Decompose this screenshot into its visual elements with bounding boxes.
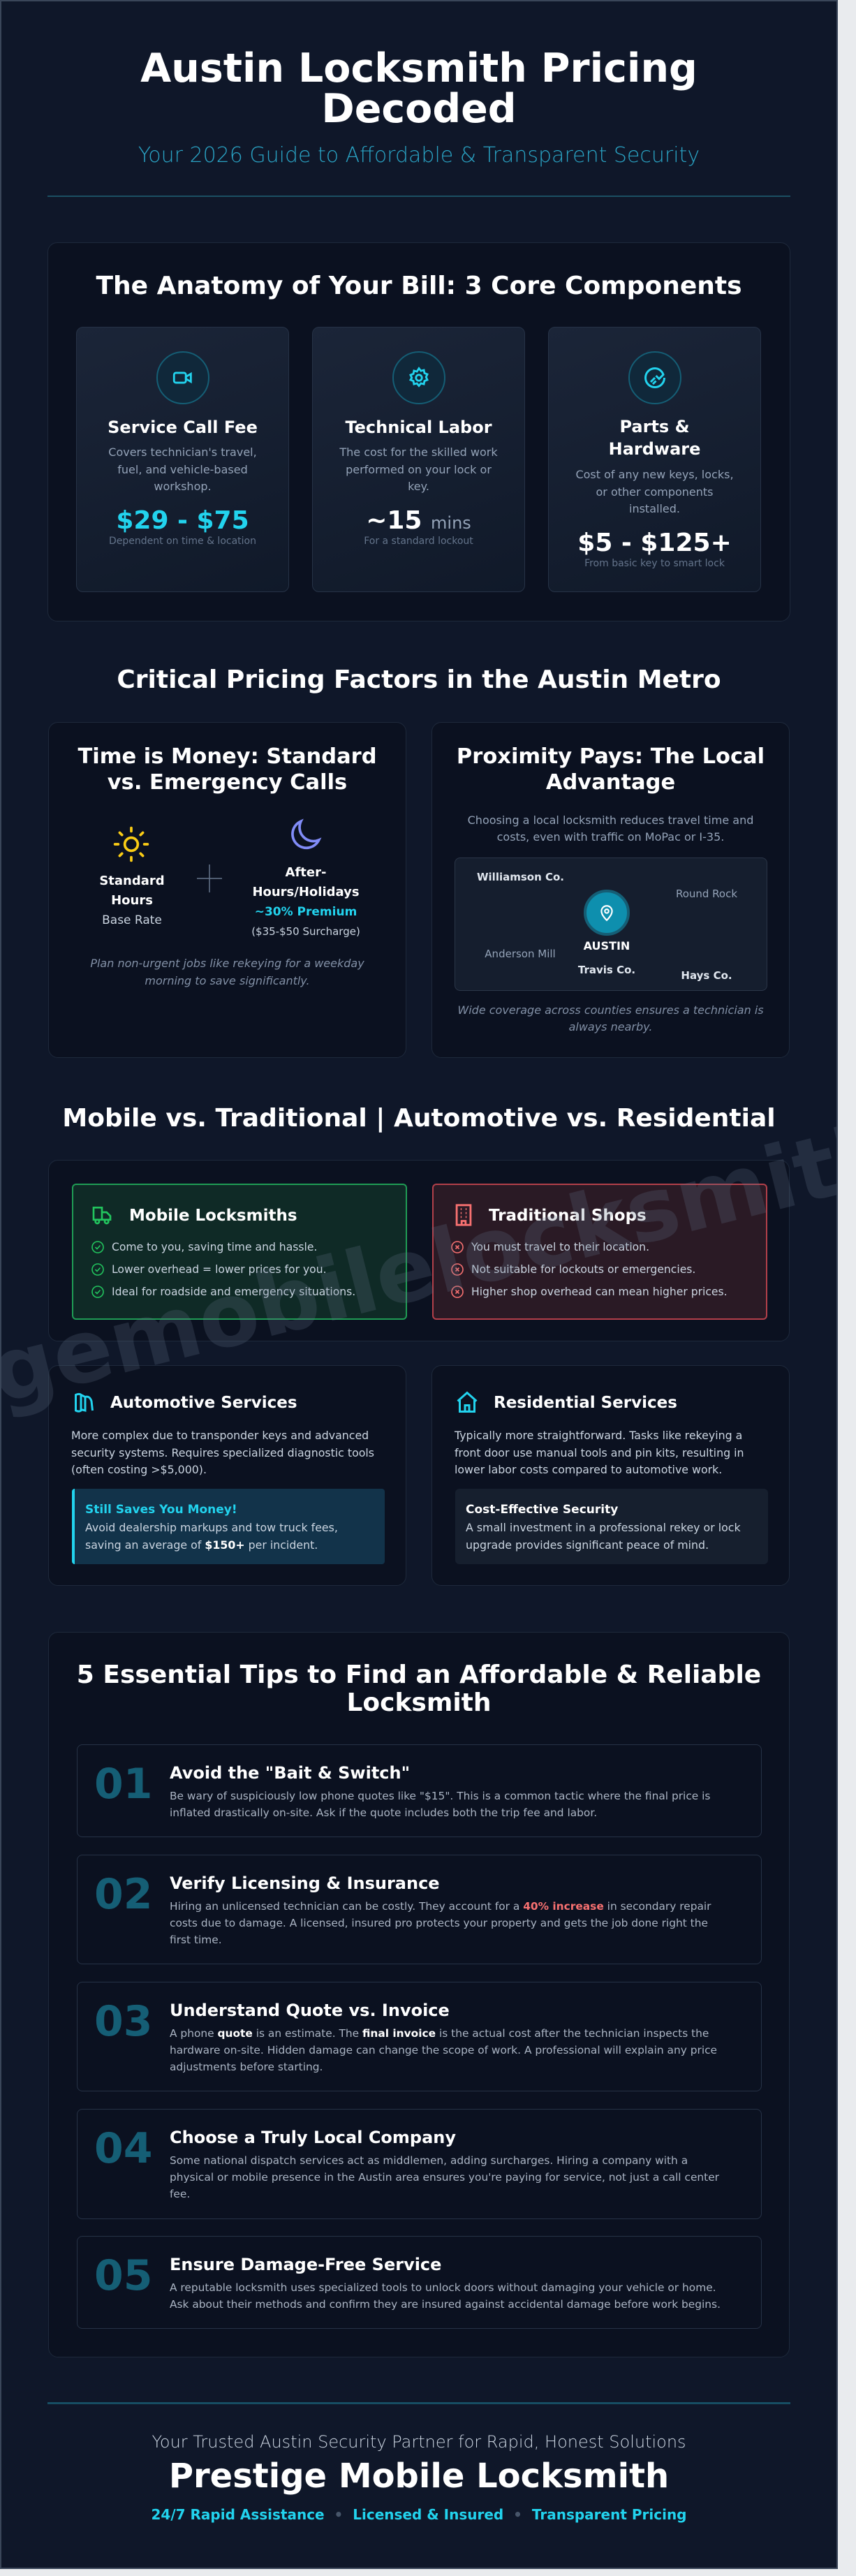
icon: moon (291, 818, 321, 849)
callout: cost-effective security: A small investment in a professional rekey or lock (466, 1521, 741, 1534)
card: parts & hardware (548, 327, 761, 592)
tip 02: Verify Licensing & Insurance (170, 1874, 440, 1893)
card: parts & hardware: Parts & (619, 417, 690, 436)
icon: video camera (156, 351, 209, 404)
panel: anatomy of your bill (47, 242, 790, 621)
panel: proximity pays: Advantage (546, 770, 675, 795)
map: Anderson Mill (485, 948, 556, 960)
panel: automotive services: (often costing >$5,000). (71, 1463, 207, 1476)
text: standard hours (99, 874, 165, 927)
tip 04 (77, 2109, 762, 2219)
icon: truck (92, 1207, 112, 1225)
note: Plan non-urgent jobs like rekeying for a weekday (90, 957, 364, 970)
panel: time is money (48, 722, 406, 1058)
map: Travis Co. (578, 964, 635, 976)
callout: still saves you money (72, 1489, 385, 1564)
tip 04: physical or mobile presence in the Austin area ensures you're paying for service, not just a call center (170, 2171, 719, 2184)
tip 02: costs due to damage. A licensed, insured pro protects your property and gets the job done right the (170, 1917, 708, 1929)
text: standard hours: Standard (99, 874, 165, 888)
list items: traditional: Not suitable for lockouts or emergencies. (471, 1263, 695, 1276)
box: mobile locksmiths: Mobile Locksmiths (129, 1207, 297, 1225)
tip 04: Some national dispatch services act as middlemen, adding surcharges. Hiring a company with a (170, 2154, 688, 2167)
title (140, 45, 698, 132)
map: Hays Co. (681, 969, 732, 982)
card: service call fee: Covers technician's travel, (108, 446, 257, 459)
heading: critical pricing factors: Critical Pricing Factors in the Austin Metro (117, 665, 721, 694)
footer: Your Trusted Austin Security Partner for Rapid, Honest Solutions (152, 2432, 686, 2452)
tip 01: Avoid the "Bait & Switch" (170, 1763, 410, 1783)
list items: mobile (91, 1241, 355, 1298)
panel: time is money: vs. Emergency Calls (108, 770, 347, 795)
tip 03: Understand Quote vs. Invoice (170, 2001, 450, 2020)
tip 04: 04 (94, 2124, 152, 2173)
tip 05 (77, 2236, 762, 2329)
tip 03: hardware on-site. Hidden damage can change the scope of work. A professional will explain any price (170, 2044, 717, 2056)
card: technical labor: The cost for the skilled work (339, 446, 498, 459)
card: technical labor: For a standard lockout (364, 536, 473, 547)
icon: building (455, 1204, 472, 1226)
callout: cost-effective security (455, 1489, 768, 1564)
panel: time is money: Time is Money: Standard (78, 744, 377, 769)
panel: residential services: Residential Services (494, 1394, 677, 1412)
card: service call fee: workshop. (154, 480, 212, 493)
panel: proximity pays: costs, even with traffic on MoPac or I-35. (497, 830, 724, 844)
tip 03 (77, 1982, 762, 2091)
callout: still saves you money: saving an average of $150+ per incident. (85, 1538, 318, 1552)
panel: 5 essential tips (48, 1632, 790, 2357)
list items: mobile: Ideal for roadside and emergency situations. (112, 1286, 355, 1298)
panel: proximity pays: Wide coverage across counties ensures a technician is (457, 1003, 764, 1017)
panel: residential services (431, 1365, 790, 1586)
card: service call fee: Service Call Fee (108, 418, 258, 437)
icon: car/door (75, 1392, 94, 1413)
text: after hours: ~30% Premium (255, 905, 357, 919)
tip 01: inflated drastically on-site. Ask if the quote includes both the trip fee and labor. (170, 1806, 597, 1819)
tip 03: A phone quote is an estimate. The final invoice is the actual cost after the technician inspects the (170, 2027, 709, 2040)
card: technical labor: performed on your lock or (346, 462, 492, 476)
panel: automotive services: More complex due to transponder keys and advanced (71, 1429, 369, 1442)
card: service call fee (76, 327, 289, 592)
card: service call fee: fuel, and vehicle-based (117, 462, 248, 476)
panel: automotive services: security systems. Requires specialized diagnostic tools (71, 1445, 374, 1459)
panel: proximity pays: always nearby. (569, 1020, 652, 1033)
list items: traditional (451, 1241, 728, 1298)
panel: proximity pays (431, 722, 790, 1058)
tip 04: fee. (170, 2188, 190, 2200)
list items: mobile: Lower overhead = lower prices for you. (112, 1263, 327, 1276)
tip 01: Be wary of suspiciously low phone quotes like "$15". This is a common tactic where the final price is (170, 1790, 710, 1802)
card: parts & hardware: or other components (596, 485, 714, 499)
text: after hours: ($35-$50 Surcharge) (251, 925, 360, 938)
panel: residential services: front door use manual tools and pin kits, resulting in (455, 1445, 744, 1459)
card: parts & hardware: installed. (629, 502, 680, 515)
list items: mobile: Come to you, saving time and hassle. (112, 1241, 317, 1253)
tip 05: Ensure Damage-Free Service (170, 2255, 441, 2274)
callout: still saves you money: Still Saves You Money! (85, 1503, 237, 1517)
title: Austin Locksmith Pricing (140, 45, 698, 91)
icon: house (457, 1391, 478, 1413)
text: standard hours: Base Rate (102, 913, 162, 927)
note (90, 957, 364, 987)
panel: proximity pays: Choosing a local locksmith reduces travel time and (468, 814, 753, 827)
icon: gear (392, 351, 445, 404)
panel: 5 essential tips: Locksmith (346, 1688, 492, 1717)
icon: plus (197, 864, 222, 892)
footer: Prestige Mobile Locksmith (169, 2457, 669, 2496)
title: Decoded (321, 86, 517, 132)
map: Williamson Co. (477, 871, 564, 883)
icon: map pin (584, 890, 630, 936)
text: after hours: After- (286, 865, 326, 880)
list items: traditional: Higher shop overhead can mean higher prices. (471, 1286, 728, 1298)
map: AUSTIN (584, 939, 630, 952)
panel: automotive services (48, 1365, 406, 1586)
panel: residential services: lower labor costs compared to automotive work. (455, 1463, 722, 1476)
heading: anatomy: The Anatomy of Your Bill: 3 Core Components (96, 272, 741, 300)
tip 02: 02 (94, 1870, 152, 1919)
tip 02: first time. (170, 1934, 222, 1946)
tip 02 (77, 1855, 762, 1964)
tip 05: Ask about their methods and confirm they are insured against accidental damage before work begins. (170, 2298, 721, 2311)
icon: sun (113, 827, 149, 862)
list items: traditional: You must travel to their location. (471, 1241, 649, 1253)
tip 03: 03 (94, 1997, 152, 2046)
footer (151, 2432, 687, 2523)
card: technical labor (312, 327, 525, 592)
box: traditional shops (432, 1184, 767, 1320)
map: Round Rock (676, 888, 737, 900)
text: after hours: Hours/Holidays (252, 885, 360, 899)
panel: automotive services: Automotive Services (110, 1394, 297, 1412)
tip 05: A reputable locksmith uses specialized tools to unlock doors without damaging your vehicle or home. (170, 2281, 716, 2294)
text: after hours (251, 865, 360, 938)
card: technical labor: key. (408, 480, 429, 493)
callout: cost-effective security: Cost-Effective Security (466, 1503, 618, 1517)
card: parts & hardware: $5 - $125+ (577, 529, 732, 557)
icon: key badge (628, 351, 681, 404)
card: technical labor: ~15 mins (366, 506, 471, 535)
callout: cost-effective security: upgrade provides significant peace of mind. (466, 1538, 709, 1552)
box: mobile locksmiths (72, 1184, 407, 1320)
card: parts & hardware: From basic key to smart lock (584, 558, 725, 569)
panel: 5 essential tips: 5 Essential Tips to Find an Affordable & Reliable (77, 1661, 761, 1689)
card: technical labor: Technical Labor (345, 418, 492, 437)
text: standard hours: Hours (111, 893, 153, 908)
panel: mobile vs traditional (48, 1160, 790, 1341)
tip 01: 01 (94, 1760, 152, 1809)
card: parts & hardware: Cost of any new keys, locks, (575, 468, 734, 481)
tip 04: Choose a Truly Local Company (170, 2128, 456, 2147)
card: parts & hardware: Hardware (609, 439, 700, 459)
map (455, 858, 767, 991)
tip 01 (77, 1744, 762, 1837)
tip 03: adjustments before starting. (170, 2061, 323, 2073)
subtitle: Your 2026 Guide to Affordable & Transparent Security (138, 143, 700, 168)
panel: residential services: Typically more straightforward. Tasks like rekeying a (455, 1429, 742, 1442)
callout: still saves you money: Avoid dealership markups and tow truck fees, (85, 1521, 338, 1534)
note: morning to save significantly. (145, 974, 310, 987)
footer: 24/7 Rapid Assistance • Licensed & Insured • Transparent Pricing (151, 2506, 687, 2523)
panel: proximity pays: Proximity Pays: The Local (457, 744, 765, 769)
heading: mobile vs traditional: Mobile vs. Traditional | Automotive vs. Residential (62, 1104, 776, 1133)
card: service call fee: Dependent on time & location (109, 536, 256, 547)
card: service call fee: $29 - $75 (116, 506, 249, 535)
tip 02: Hiring an unlicensed technician can be costly. They account for a 40% increase in secondary repair (170, 1900, 711, 1913)
box: traditional shops: Traditional Shops (489, 1207, 647, 1225)
tip 05: 05 (94, 2251, 152, 2300)
